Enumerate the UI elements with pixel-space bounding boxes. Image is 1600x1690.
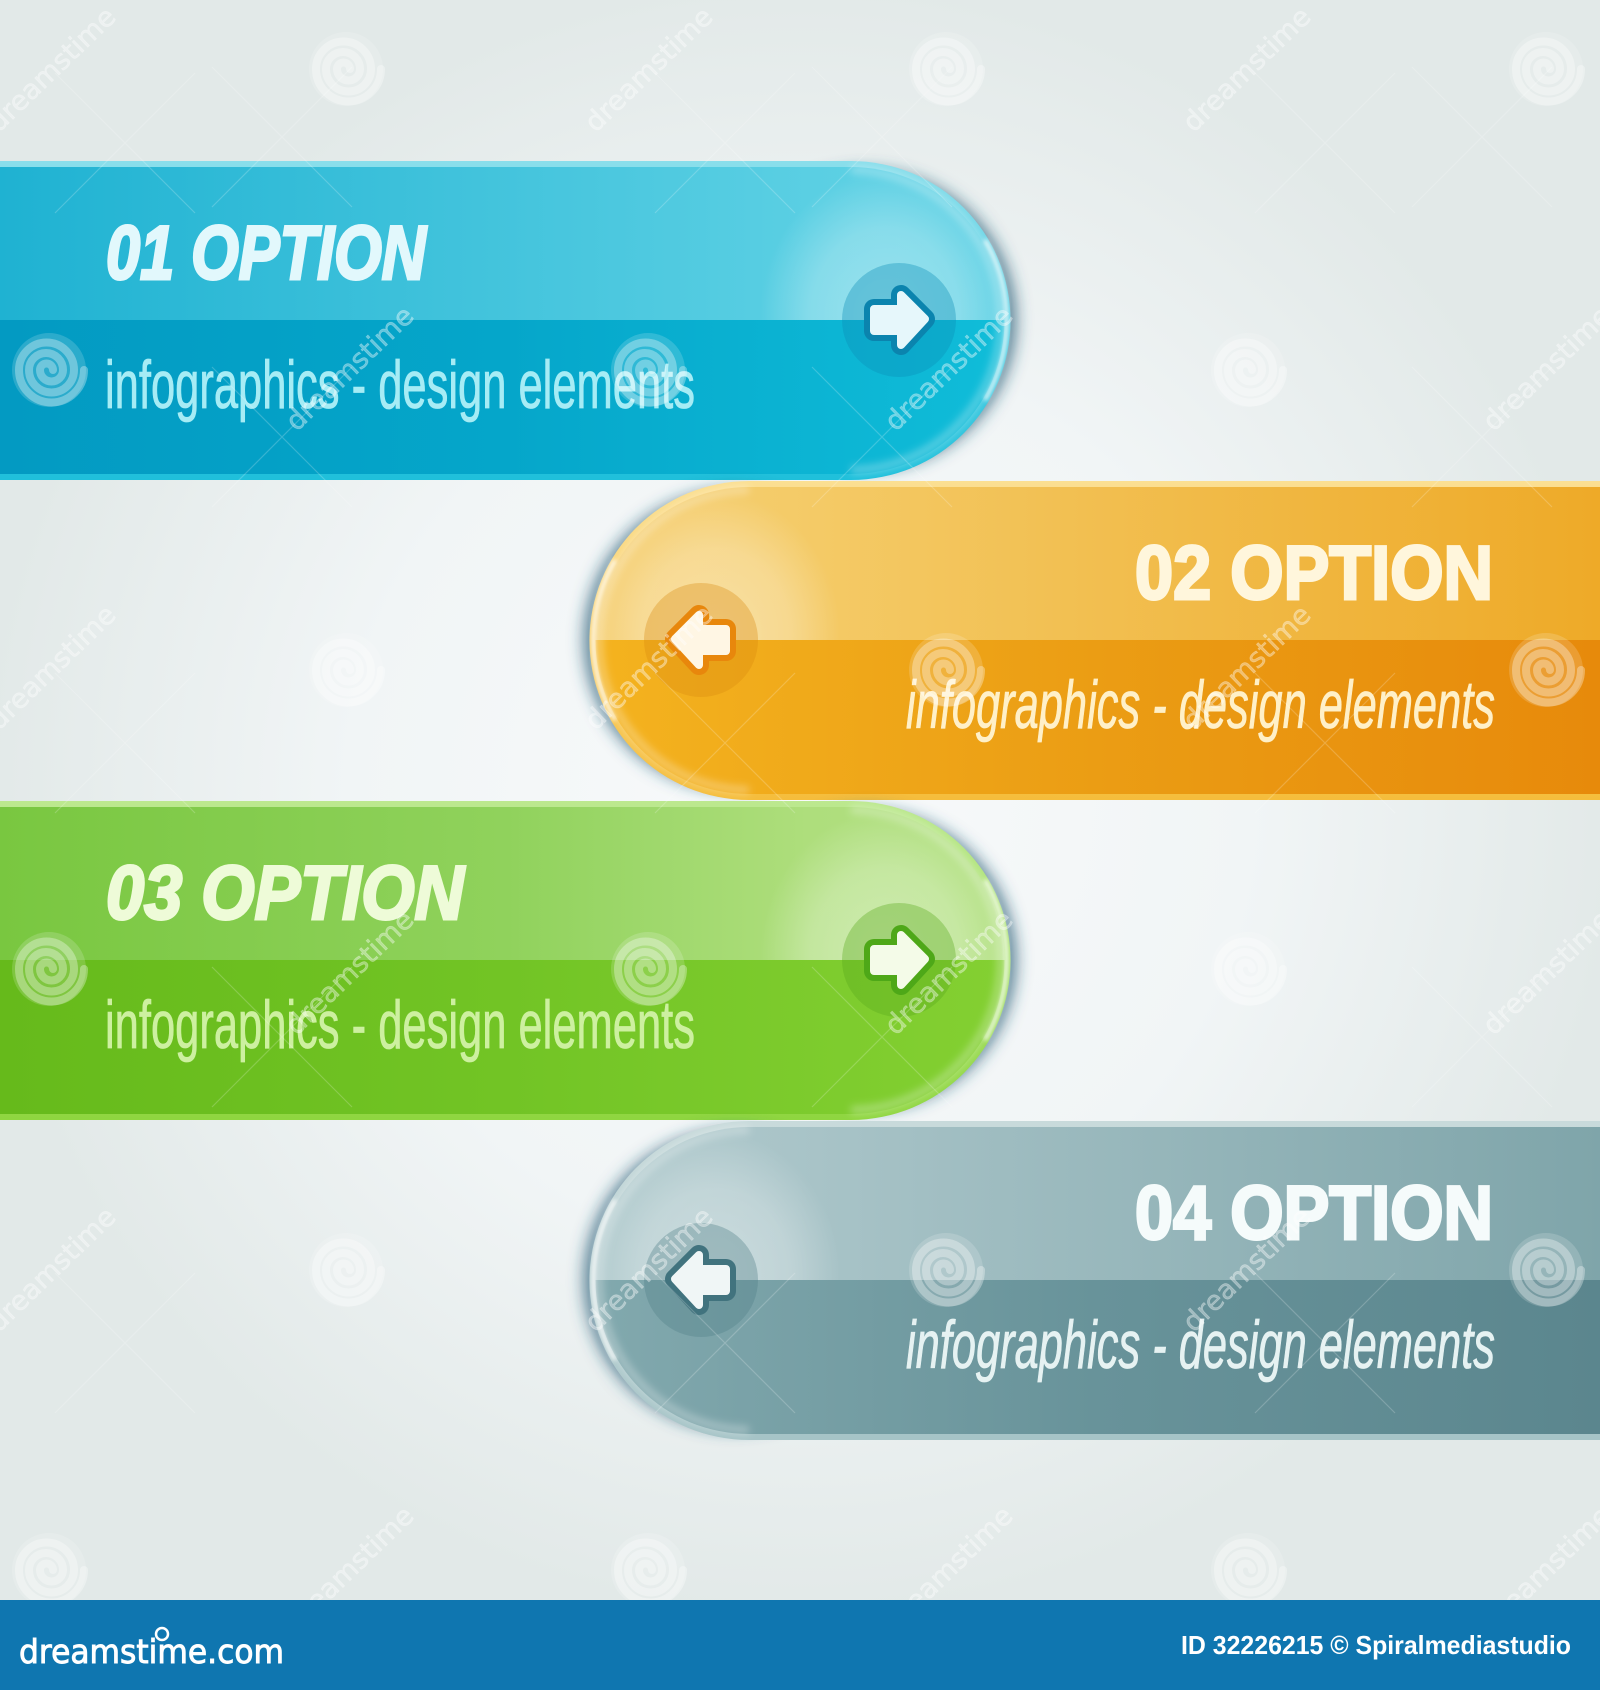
heading: 01 OPTION: 01 OPTION <box>106 211 428 296</box>
watermark overlay: dreamstime <box>879 300 1019 437</box>
icon: left arrow button <box>644 1223 758 1337</box>
watermark overlay: dreamstime <box>280 1500 420 1637</box>
watermark overlay: dreamstime <box>280 300 420 437</box>
footer credit: image id: ID 32226215 © Spiralmediastudio <box>1181 1630 1571 1660</box>
watermark overlay: dreamstime <box>579 599 719 736</box>
icon: right arrow button <box>842 263 956 377</box>
panel: option 01 blue pill <box>0 160 1020 480</box>
panel: option 03 green pill <box>0 800 1020 1120</box>
heading: 02 OPTION: 02 OPTION <box>1135 531 1493 616</box>
footer logo: dreamstime.com: dreamstime.com <box>19 1632 284 1671</box>
footer bar <box>0 1600 1600 1690</box>
panel: option 04 grey pill <box>580 1120 1600 1440</box>
watermark overlay: dreamstime <box>1177 599 1317 736</box>
watermark overlay: dreamstime <box>879 1500 1019 1637</box>
watermark overlay: dreamstime <box>1177 1 1317 138</box>
watermark overlay: dreamstime <box>280 904 420 1041</box>
watermark overlay: dreamstime <box>579 1201 719 1338</box>
watermark overlay: dreamstime <box>879 904 1019 1041</box>
icon: left arrow button <box>644 583 758 697</box>
heading: 03 OPTION: 03 OPTION <box>106 851 466 936</box>
watermark overlay: dreamstime <box>1177 1201 1317 1338</box>
text: subtitle 03: infographics - design elements <box>105 987 695 1063</box>
heading: 04 OPTION: 04 OPTION <box>1135 1171 1493 1256</box>
text: subtitle 01: infographics - design elements <box>105 347 695 423</box>
watermark overlay: dreamstime <box>579 1 719 138</box>
icon: right arrow button <box>842 903 956 1017</box>
panel: option 02 orange pill <box>580 480 1600 800</box>
